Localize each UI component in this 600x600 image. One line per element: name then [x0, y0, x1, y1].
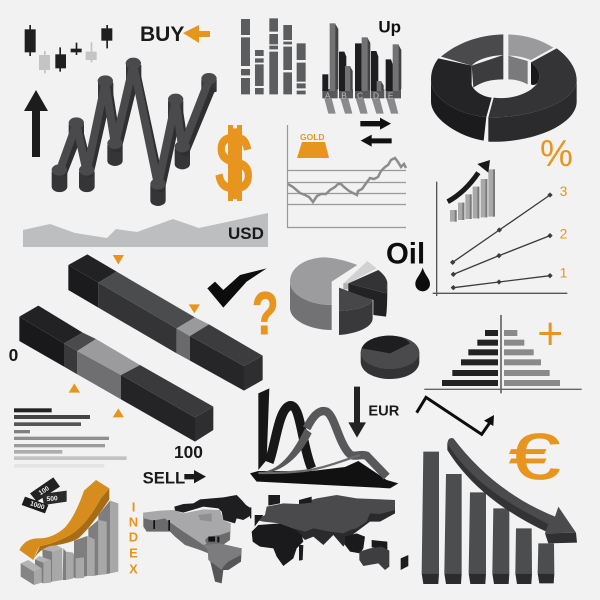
- black bars: [322, 43, 393, 91]
- map: small islands: [250, 495, 408, 570]
- bar labels: B: [341, 90, 347, 100]
- chart: bell curves ribbon: [250, 388, 398, 488]
- chart: mini bars with rising arrow: [448, 160, 495, 222]
- chart: multi-line with axes: 1: [560, 265, 568, 281]
- label: INDEX vertical: D: [129, 530, 138, 544]
- chart: population pyramid: [424, 315, 582, 393]
- markers: orange triangles: [69, 255, 200, 417]
- bar labels: E: [388, 90, 394, 100]
- map: 3D world: [143, 495, 408, 583]
- bar labels: [325, 90, 394, 100]
- labels: 0 and 100: 100: [174, 442, 203, 462]
- map: Eurasia top: [256, 495, 395, 533]
- map: North America top: [143, 509, 231, 545]
- icon: plus: [539, 323, 561, 345]
- arrow with EUR label: EUR: [368, 404, 400, 420]
- chart: 3D bar upper: [68, 254, 263, 391]
- heading: BUY with arrow: BUY: [140, 23, 184, 46]
- bar shadows: [324, 98, 398, 114]
- icon: euro sign: €: [509, 420, 560, 493]
- map: South America wall: [208, 545, 242, 583]
- chart: gold price line: [287, 125, 406, 228]
- chart: 3D bar lower: [19, 306, 213, 442]
- base strips: [322, 89, 401, 98]
- heading: BUY with arrow: [140, 23, 210, 46]
- map: Southeast Asia: [345, 533, 365, 553]
- top surfaces: [441, 34, 503, 66]
- bar labels: C: [357, 90, 363, 100]
- arrow with EUR label: [348, 387, 400, 438]
- icon: check mark: [207, 268, 267, 308]
- map: dark details: [153, 520, 219, 542]
- chart: 3D zigzag line with cylinders: [52, 58, 217, 206]
- labels: 0 and 100: 0: [9, 345, 18, 365]
- inner walls: [472, 55, 503, 88]
- banknotes: 500: [46, 495, 58, 503]
- 3D columns: [21, 501, 118, 585]
- chart: small 3D pie: [361, 336, 419, 379]
- chart: index bars with orange arrow: [19, 477, 118, 585]
- chart: donut: [431, 34, 577, 142]
- label: gold bar: GOLD: [300, 132, 325, 142]
- label: INDEX vertical: N: [129, 514, 138, 530]
- area chart: USD: USD: [228, 224, 264, 243]
- grey bar fronts: [330, 23, 399, 91]
- map: Hudson detail: [198, 513, 212, 522]
- chart: multi-line with axes: [433, 182, 568, 296]
- banknotes: 100: [38, 485, 51, 497]
- label: INDEX vertical: E: [129, 545, 138, 560]
- label: INDEX vertical: [129, 500, 138, 576]
- map: South America top: [203, 543, 242, 570]
- stacked column bars: [241, 18, 306, 94]
- chart: 3D bars A to E with Up label: Up: [378, 17, 401, 36]
- orange rising arrow: [19, 480, 109, 560]
- chart: multi-line with axes: 2: [560, 226, 568, 242]
- map: North America wall: [143, 513, 231, 554]
- arrow: zigzag: [417, 397, 494, 434]
- grey bar sides: [335, 23, 401, 91]
- arrows: exchange: [360, 118, 392, 147]
- bar labels: D: [373, 90, 379, 100]
- icon: dollar sign: $: [216, 116, 252, 210]
- label: SELL with arrow: [143, 468, 206, 487]
- map: Australia: [359, 547, 389, 570]
- icon: percent: %: [540, 133, 573, 174]
- map: Eurasia wall: [293, 500, 395, 547]
- map: Greenland and northern Canada: [174, 495, 251, 523]
- banknotes: [22, 477, 67, 513]
- candlestick chart: [25, 25, 112, 73]
- text block: horizontal lines: [14, 408, 127, 468]
- map: Indonesia islands: [372, 540, 387, 550]
- arrow: up: [24, 90, 48, 157]
- chart: declining bars with arrow: [422, 438, 577, 584]
- label: INDEX vertical: I: [132, 500, 135, 514]
- area chart: USD: [23, 213, 268, 247]
- banknotes: 1000: [29, 500, 45, 511]
- chart: exploded 3D pie: [290, 257, 387, 335]
- labels: 0 and 100: [9, 345, 203, 462]
- icon: question mark: ?: [252, 281, 278, 348]
- chart: multi-line with axes: 3: [560, 183, 568, 199]
- map: Africa: [252, 523, 303, 566]
- outer walls: [431, 80, 486, 141]
- bar labels: A: [325, 90, 331, 100]
- label: SELL with arrow: SELL: [143, 468, 185, 487]
- label: INDEX vertical: X: [129, 561, 138, 576]
- chart: 3D bars A to E with Up label: [322, 17, 401, 114]
- label: Oil with drop: Oil: [386, 237, 425, 270]
- label: Oil with drop: [386, 237, 430, 291]
